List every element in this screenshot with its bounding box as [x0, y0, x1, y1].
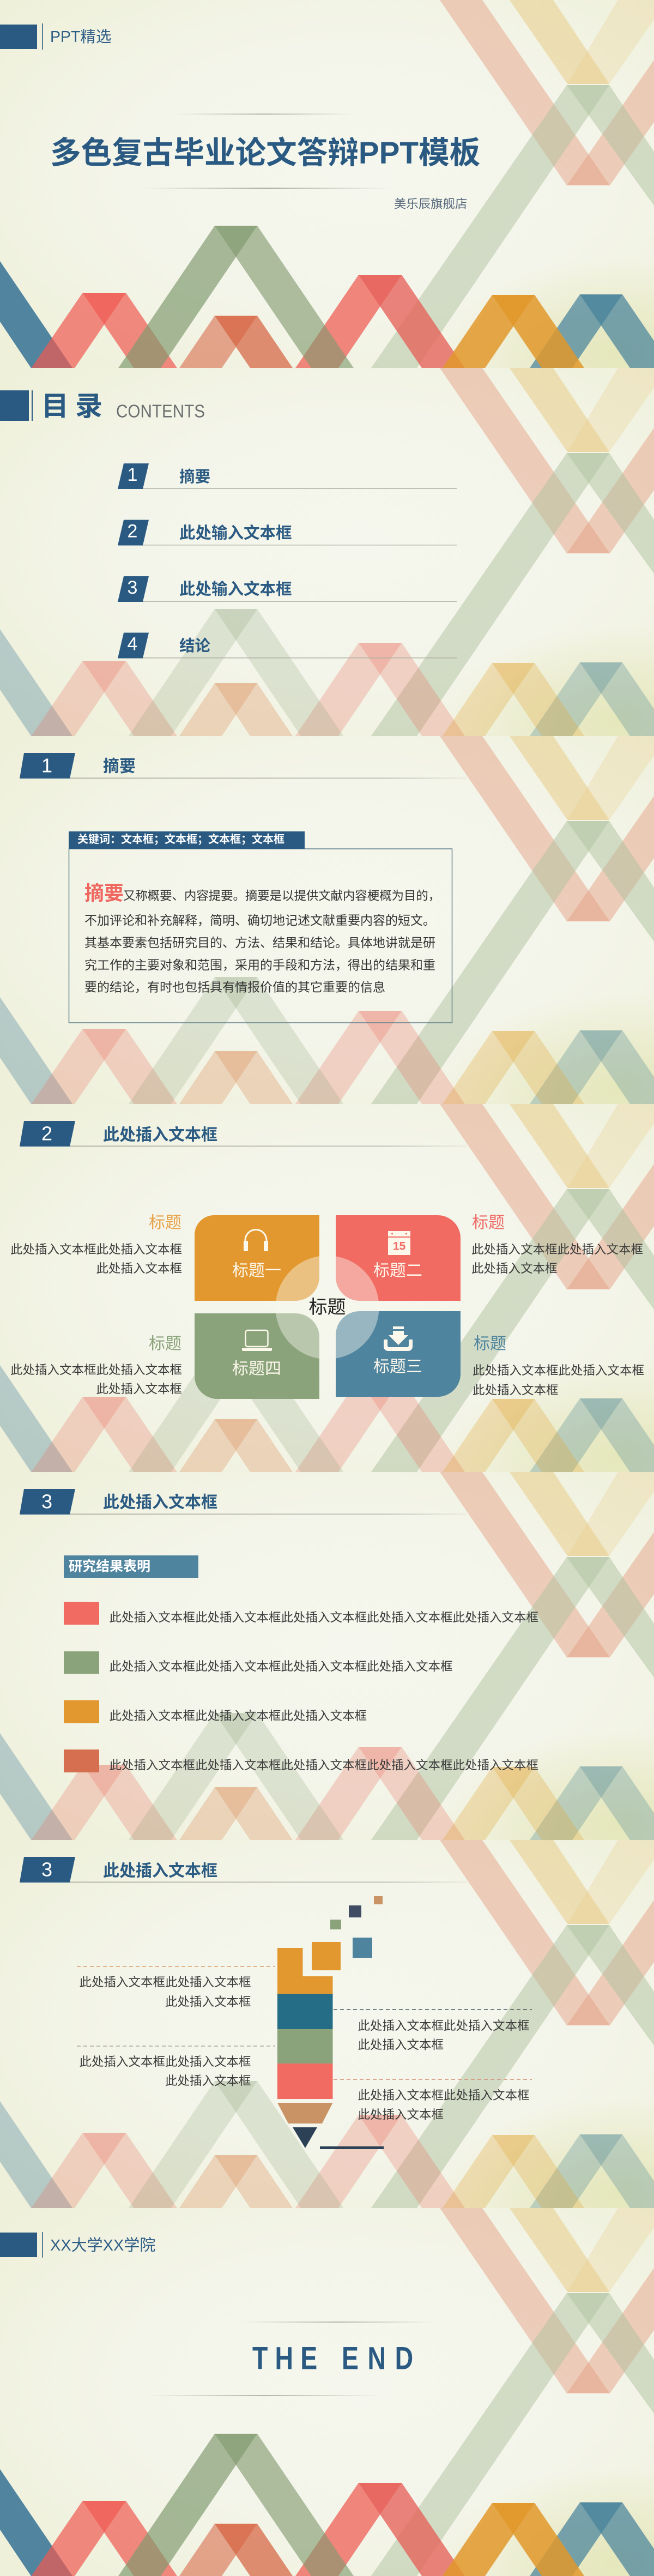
result row 4 [64, 1749, 538, 1772]
result row 2 [64, 1651, 453, 1674]
list item 3: 此处输入文本框 [179, 580, 292, 599]
panel: title slide [0, 0, 654, 368]
label: PPT精选: PPT精选 [50, 28, 111, 46]
callout: pencil upper left: 此处插入文本框此处插入文本框 [79, 1976, 251, 1989]
quadrant: teal [336, 1311, 461, 1397]
callout: pencil lower right [334, 2079, 532, 2122]
icon: calendar: 15 [393, 1240, 405, 1253]
closing title: THE END [252, 2340, 413, 2376]
callout: pencil upper right: 此处插入文本框 [358, 2038, 444, 2052]
callout: pencil upper right: 此处插入文本框此处插入文本框 [358, 2019, 530, 2032]
section header 3: 3 [41, 1491, 52, 1512]
result row 2: 此处插入文本框此处插入文本框此处插入文本框此处插入文本框 [109, 1660, 453, 1674]
section header 2 [20, 1121, 467, 1147]
callout: pencil upper left: 此处插入文本框 [165, 1995, 251, 2008]
icon: headphones [244, 1230, 268, 1251]
callout: top left: 此处插入文本框 [96, 1262, 182, 1276]
section header 3: 此处插入文本框 [103, 1494, 217, 1511]
list item 2: 此处输入文本框 [179, 524, 292, 542]
closing title: THE END: THE [252, 2340, 317, 2376]
list item 4: 结论 [179, 637, 211, 655]
callout: bottom left: 此处插入文本框 [96, 1383, 182, 1396]
abstract body text: 又称概要、内容提要。摘要是以提供文献内容梗概为目的， [123, 889, 440, 903]
callout: top right [471, 1214, 643, 1276]
callout: pencil upper right [334, 2010, 532, 2052]
list item 1: 1 [128, 464, 137, 485]
abstract body text: 摘要 [84, 882, 124, 904]
callout: pencil lower left: 此处插入文本框 [165, 2074, 251, 2088]
icon: laptop [242, 1330, 272, 1351]
list item 4 [118, 632, 457, 659]
subtitle: store name: 美乐辰旗舰店 [394, 197, 467, 210]
background: abstract slide ribbons [0, 736, 654, 1104]
abstract body text [84, 882, 440, 994]
section header 1 [20, 753, 467, 779]
abstract body text: 究工作的主要对象和范围，采用的手段和方法，得出的结果和重 [84, 958, 435, 972]
quadrant label: 标题四: 标题四 [232, 1360, 281, 1378]
list item 3 [118, 576, 457, 602]
callout: bottom left: 此处插入文本框此处插入文本框 [10, 1363, 182, 1377]
list item 2: 2 [128, 521, 137, 542]
keywords bar: 关键词：文本框；文本框；文本框；文本框 [77, 832, 284, 846]
section header 3 (second) [20, 1857, 467, 1883]
quadrant: green [195, 1313, 319, 1399]
callout: top left: 此处插入文本框此处插入文本框 [10, 1243, 182, 1256]
closing title: THE END: END [342, 2340, 413, 2376]
icon: calendar [388, 1231, 410, 1255]
heading: CONTENTS: CONTENTS [116, 401, 205, 421]
callout: top right: 标题 [472, 1214, 505, 1232]
callout: bottom right: 此处插入文本框 [473, 1384, 559, 1397]
quadrant: orange [195, 1215, 319, 1301]
callout: bottom right [473, 1335, 644, 1397]
list item 1 [118, 463, 457, 489]
heading tag: blue block [0, 390, 33, 421]
section header 3 (second): 3 [41, 1858, 52, 1881]
quadrant label: 标题三: 标题三 [373, 1358, 422, 1376]
result row 4: 此处插入文本框此处插入文本框此处插入文本框此处插入文本框此处插入文本框 [109, 1759, 538, 1772]
quadrant: red [336, 1215, 461, 1301]
pencil graphic [277, 1896, 384, 2149]
callout: top left [10, 1214, 182, 1276]
section header 1: 摘要 [103, 758, 136, 775]
result row 1 [64, 1602, 538, 1625]
callout: top left: 标题 [149, 1214, 181, 1232]
centre label: 标题 [308, 1297, 346, 1318]
abstract text box [69, 849, 452, 1023]
icon: download [384, 1326, 413, 1351]
callout: top right: 此处插入文本框此处插入文本框 [471, 1243, 643, 1256]
keywords bar [69, 831, 305, 849]
section header 3 [20, 1489, 467, 1515]
corner tag: blue block [0, 23, 43, 50]
results heading bar [64, 1555, 198, 1578]
panel: contents slide [0, 368, 654, 736]
panel: four-quadrant slide [0, 1104, 654, 1472]
panel: end slide [0, 2208, 654, 2576]
background: pencil slide ribbons [0, 1840, 654, 2208]
centre circle [276, 1256, 379, 1359]
background: quadrant slide ribbons [0, 1104, 654, 1472]
title: 多色复古毕业论文答辩PPT模板 [50, 135, 480, 170]
list item 4: 4 [128, 634, 137, 654]
background: contents slide ribbons [0, 368, 654, 736]
divider below title [142, 188, 392, 189]
abstract body text: 要的结论，有时也包括具有情报价值的其它重要的信息 [84, 980, 385, 994]
callout: bottom right: 标题 [474, 1335, 506, 1353]
divider above title [175, 113, 354, 114]
list item 2 [118, 520, 457, 545]
section header 3 (second): 此处插入文本框 [103, 1862, 217, 1880]
callout: pencil lower right: 此处插入文本框此处插入文本框 [358, 2089, 530, 2102]
callout: bottom right: 此处插入文本框此处插入文本框 [473, 1364, 644, 1377]
callout: pencil lower left [77, 2046, 275, 2088]
panel: research results slide [0, 1472, 654, 1840]
corner tag: blue block [0, 2232, 43, 2258]
callout: top right: 此处插入文本框 [471, 1262, 558, 1276]
abstract body text: 不加评论和补充解释，简明、确切地记述文献重要内容的短文。 [84, 913, 435, 927]
list item 3: 3 [128, 577, 137, 598]
callout: pencil upper left [77, 1966, 275, 2008]
callout: bottom left: 标题 [149, 1335, 181, 1353]
callout: pencil lower left: 此处插入文本框此处插入文本框 [79, 2055, 251, 2068]
section header 1: 1 [41, 755, 52, 776]
background: results slide ribbons [0, 1472, 654, 1840]
quadrant label: 标题二: 标题二 [373, 1262, 422, 1280]
callout: pencil lower right: 此处插入文本框 [358, 2108, 444, 2122]
results heading bar: 研究结果表明 [69, 1559, 150, 1574]
callout: bottom left [10, 1335, 182, 1396]
divider above closing title [240, 2321, 436, 2322]
abstract body text: 其基本要素包括研究目的、方法、结果和结论。具体地讲就是研 [84, 936, 435, 950]
result row 1: 此处插入文本框此处插入文本框此处插入文本框此处插入文本框此处插入文本框 [109, 1610, 538, 1625]
section header 2: 2 [41, 1122, 52, 1145]
result row 3 [64, 1700, 367, 1723]
quadrant label: 标题一: 标题一 [232, 1262, 281, 1280]
result row 3: 此处插入文本框此处插入文本框此处插入文本框 [109, 1709, 367, 1723]
heading: 目录: 目录 [41, 391, 109, 421]
panel: abstract slide [0, 736, 654, 1104]
label: XX大学XX学院: XX大学XX学院 [50, 2236, 155, 2254]
background: title slide ribbons [0, 0, 654, 368]
background: end slide ribbons [0, 2208, 654, 2576]
panel: pencil slide [0, 1840, 654, 2208]
list item 1: 摘要 [179, 468, 210, 486]
section header 2: 此处插入文本框 [103, 1126, 217, 1144]
